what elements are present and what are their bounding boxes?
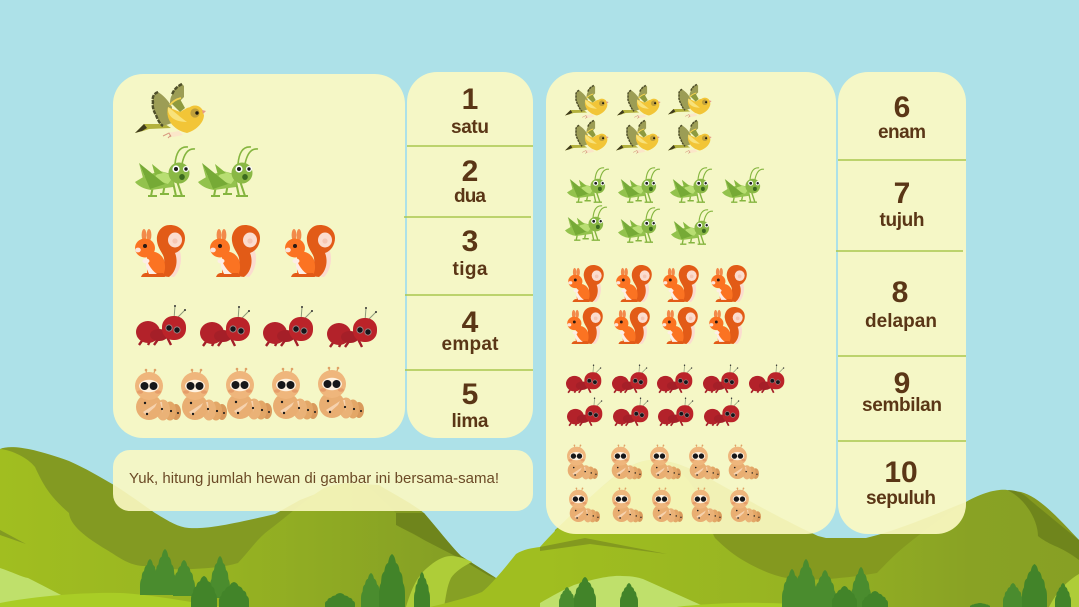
- number 6 enam: 6: [894, 91, 910, 124]
- number 8 delapan: [865, 276, 937, 332]
- number 7 tujuh: 7: [894, 177, 910, 210]
- icons: four ants: [136, 305, 377, 347]
- number 4 empat: [442, 306, 499, 355]
- number 2 dua: 2: [462, 155, 478, 188]
- panel: animals 1 to 5: [113, 74, 405, 438]
- number 8 delapan: delapan: [865, 311, 937, 332]
- panel: number words 1 to 5: [404, 72, 533, 438]
- number 9 sembilan: [862, 367, 942, 416]
- number 7 tujuh: [880, 177, 924, 231]
- icons: three squirrels: [135, 225, 335, 277]
- icon: one bird: [135, 84, 206, 138]
- trees: [140, 549, 1071, 607]
- icons: six birds: [565, 84, 712, 154]
- panel: number words 6 to 10: [836, 72, 966, 534]
- text box: instruction: [113, 450, 533, 511]
- number 5 lima: [452, 378, 489, 432]
- icons: five caterpillars: [135, 367, 364, 420]
- number 2 dua: [454, 155, 486, 207]
- icons: seven grasshoppers: [565, 168, 764, 244]
- number 5 lima: lima: [452, 411, 489, 432]
- number 9 sembilan: 9: [894, 367, 910, 400]
- number 10 sepuluh: 10: [884, 456, 918, 489]
- icons: nine ants: [566, 365, 784, 426]
- number 3 tiga: tiga: [452, 259, 488, 280]
- number 4 empat: 4: [462, 306, 479, 339]
- number 3 tiga: 3: [462, 225, 478, 258]
- number 2 dua: dua: [454, 186, 486, 207]
- number 1 satu: satu: [451, 117, 489, 138]
- number 8 delapan: 8: [892, 276, 908, 309]
- number 10 sepuluh: [866, 456, 936, 509]
- number 1 satu: [451, 83, 489, 138]
- text box: instruction: Yuk, hitung jumlah hewan di gambar ini bersama-sama!: [129, 470, 499, 487]
- number 3 tiga: [452, 225, 488, 280]
- number 10 sepuluh: sepuluh: [866, 488, 936, 509]
- number 1 satu: 1: [462, 83, 478, 116]
- hills landscape: [0, 447, 1079, 607]
- icons: eight squirrels: [567, 265, 747, 344]
- number 7 tujuh: tujuh: [880, 210, 924, 231]
- number 5 lima: 5: [462, 378, 478, 411]
- number 6 enam: enam: [878, 122, 926, 143]
- icons: two grasshoppers: [135, 147, 258, 196]
- icons: ten caterpillars: [567, 444, 761, 522]
- number 4 empat: empat: [442, 334, 499, 355]
- panel: animals 6 to 10: [546, 72, 836, 534]
- number 6 enam: [878, 91, 926, 143]
- number 9 sembilan: sembilan: [862, 395, 942, 416]
